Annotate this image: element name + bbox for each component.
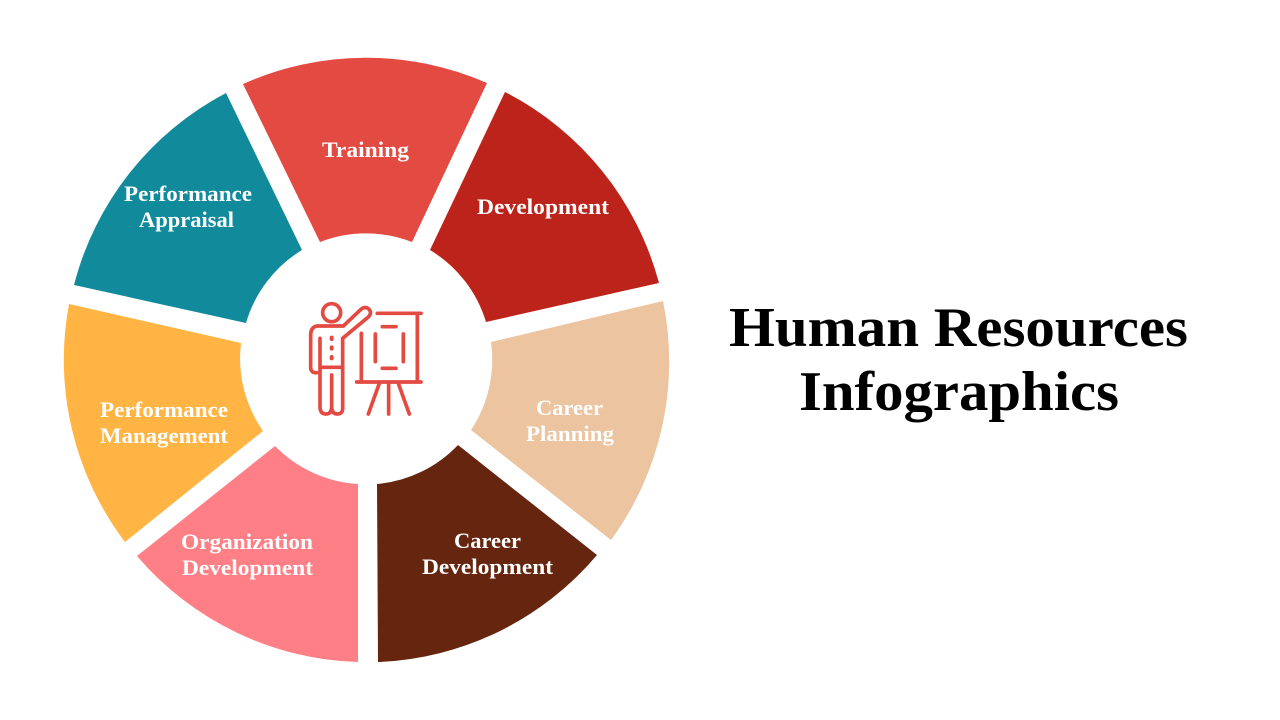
segment: Training: Training <box>322 137 409 162</box>
segment: Career Planning: Planning <box>526 421 614 446</box>
segment: Organization Development: Development <box>182 555 314 580</box>
segment: Career Development: Career <box>454 528 521 553</box>
icon: presenter at board <box>311 304 421 414</box>
segment: Performance Appraisal: Appraisal <box>139 207 234 232</box>
segment: Career Development <box>377 445 597 662</box>
segment: Performance Management: Management <box>100 423 229 448</box>
segment: Performance Appraisal: Performance <box>124 181 252 206</box>
segment: Development: Development <box>477 194 610 219</box>
segment: Performance Management <box>64 304 263 542</box>
segment: Organization Development <box>137 446 358 662</box>
title: Infographics <box>799 361 1119 423</box>
title <box>729 297 1188 423</box>
segment: Performance Management: Performance <box>100 397 228 422</box>
segment: Performance Appraisal <box>74 93 302 323</box>
segment: Training <box>243 58 487 242</box>
segment: Career Development: Development <box>422 554 554 579</box>
segment: Organization Development: Organization <box>181 529 313 554</box>
segment: Career Planning: Career <box>536 395 603 420</box>
segment: Development <box>430 92 659 322</box>
title: Human Resources <box>729 297 1188 359</box>
segment: Career Planning <box>471 301 669 540</box>
